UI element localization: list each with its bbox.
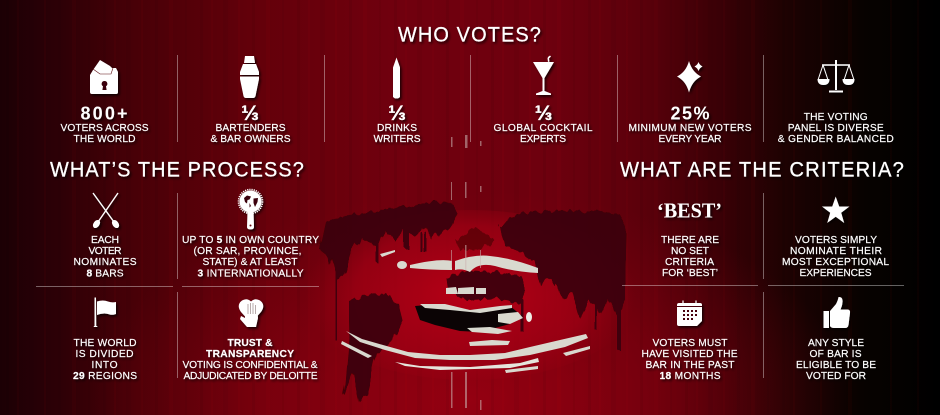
item: each voter nominates (74, 193, 137, 280)
item: 800+ voters: 800+ (80, 104, 128, 124)
item: 29 regions: IS DIVIDED (76, 349, 134, 360)
dividers (36, 193, 319, 378)
item: no set criteria (657, 198, 722, 279)
item: any style of bar: ELIGIBLE TO BE (796, 360, 876, 371)
item: nominate experiences: NOMINATE THEIR (790, 246, 882, 257)
item: visited 18 months: BAR IN THE PAST (646, 360, 734, 371)
item: global cocktail experts (494, 56, 593, 145)
icon: cocktail shaker (240, 56, 259, 98)
item: 29 regions (73, 298, 137, 382)
item: diverse panel: PANEL IS DIVERSE (788, 123, 884, 134)
icon: star (822, 196, 850, 223)
item: diverse panel: THE VOTING (804, 112, 868, 123)
item: trust and transparency: TRANSPARENCY (206, 349, 294, 360)
item: 800+ voters (60, 60, 149, 145)
icon: thumbs up (824, 297, 850, 328)
item: 800+ voters: VOTERS ACROSS (60, 123, 149, 134)
item: visited 18 months: VOTERS MUST (652, 338, 728, 349)
item: 29 regions: INTO (92, 360, 118, 371)
item: up to 5 in own country: UP TO 5 IN OWN COUNTRY (182, 235, 319, 246)
item: nominate experiences: MOST EXCEPTIONAL (782, 257, 889, 268)
icon: flag (94, 298, 116, 327)
item: 800+ voters: THE WORLD (74, 134, 136, 145)
dividers (178, 55, 764, 142)
item: up to 5 in own country (182, 190, 319, 280)
item: bartenders: BARTENDERS (216, 123, 286, 134)
heading: criteria: WHAT ARE THE CRITERIA? (620, 158, 905, 182)
icon: ballot envelope (90, 60, 118, 94)
item: trust and transparency: ADJUDICATED BY DELOITTE (184, 371, 318, 382)
item: 25% new voters: EVERY YEAR (658, 134, 722, 145)
item: global cocktail experts: ⅓ (535, 102, 552, 125)
icon: scales (818, 60, 854, 92)
icon: crossed bar spoons (91, 193, 121, 229)
drips (451, 135, 482, 410)
item: each voter nominates: 8 BARS (86, 268, 124, 280)
item: global cocktail experts: GLOBAL COCKTAIL (494, 123, 593, 134)
item: any style of bar: ANY STYLE (808, 338, 864, 349)
panel: who votes (60, 24, 894, 145)
dark smeared world map (320, 202, 628, 402)
item: visited 18 months (642, 300, 738, 382)
rippled lips image (300, 135, 640, 410)
icon: strainer globe (238, 190, 262, 230)
teeth and lip highlights (341, 250, 590, 373)
item: nominate experiences (782, 196, 889, 279)
icon: pencil (393, 58, 400, 98)
item: trust and transparency: VOTING IS CONFIDENTIAL & (182, 360, 318, 371)
item: each voter nominates: VOTER (88, 246, 122, 257)
dividers (622, 193, 904, 378)
item: diverse panel: & GENDER BALANCED (778, 134, 894, 145)
icon: martini glass (533, 56, 554, 95)
item: any style of bar (796, 297, 876, 382)
heading: who votes: WHO VOTES? (398, 24, 542, 46)
panel: what are the criteria (620, 158, 905, 382)
icon: best wordmark: ‘BEST’ (657, 198, 722, 222)
item: nominate experiences: EXPERIENCES (800, 268, 872, 279)
item: up to 5 in own country: 3 INTERNATIONALLY (198, 268, 304, 280)
item: each voter nominates: NOMINATES (74, 257, 137, 268)
item: no set criteria: THERE ARE (661, 235, 719, 246)
item: visited 18 months: 18 MONTHS (660, 371, 721, 382)
item: any style of bar: OF BAR IS (810, 349, 862, 360)
heading: process: WHAT’S THE PROCESS? (50, 158, 305, 182)
item: diverse panel (778, 60, 894, 145)
item: 25% new voters: 25% (670, 104, 710, 124)
item: 25% new voters (628, 61, 752, 145)
item: 25% new voters: MINIMUM NEW VOTERS (628, 123, 752, 134)
icon: calendar (677, 300, 702, 326)
item: drinks writers: ⅓ (388, 102, 406, 125)
item: any style of bar: VOTED FOR (806, 371, 866, 382)
item: nominate experiences: VOTERS SIMPLY (795, 235, 877, 246)
item: drinks writers (374, 58, 421, 145)
item: no set criteria: FOR ‘BEST’ (662, 268, 718, 279)
item: trust and transparency (182, 299, 318, 382)
item: bartenders: ⅓ (241, 102, 259, 125)
item: visited 18 months: HAVE VISITED THE (642, 349, 738, 360)
item: trust and transparency: TRUST & (228, 338, 273, 349)
item: 29 regions: THE WORLD (74, 338, 136, 349)
item: up to 5 in own country: STATE) & AT LEAST (202, 257, 298, 268)
item: 29 regions: 29 REGIONS (73, 371, 137, 382)
panel: what's the process (36, 158, 319, 382)
item: no set criteria: CRITERIA (665, 257, 714, 268)
red lips glow (300, 210, 640, 380)
icon: sparkle (677, 61, 702, 92)
item: drinks writers: WRITERS (374, 134, 421, 145)
item: bartenders: & BAR OWNERS (210, 134, 291, 145)
item: up to 5 in own country: (OR SAR, PROVINCE, (194, 246, 302, 257)
item: bartenders (210, 56, 291, 145)
item: no set criteria: NO SET (671, 246, 709, 257)
item: global cocktail experts: EXPERTS (520, 134, 566, 145)
item: drinks writers: DRINKS (377, 123, 417, 134)
icon: heart and hand (239, 299, 263, 327)
item: each voter nominates: EACH (91, 235, 119, 246)
